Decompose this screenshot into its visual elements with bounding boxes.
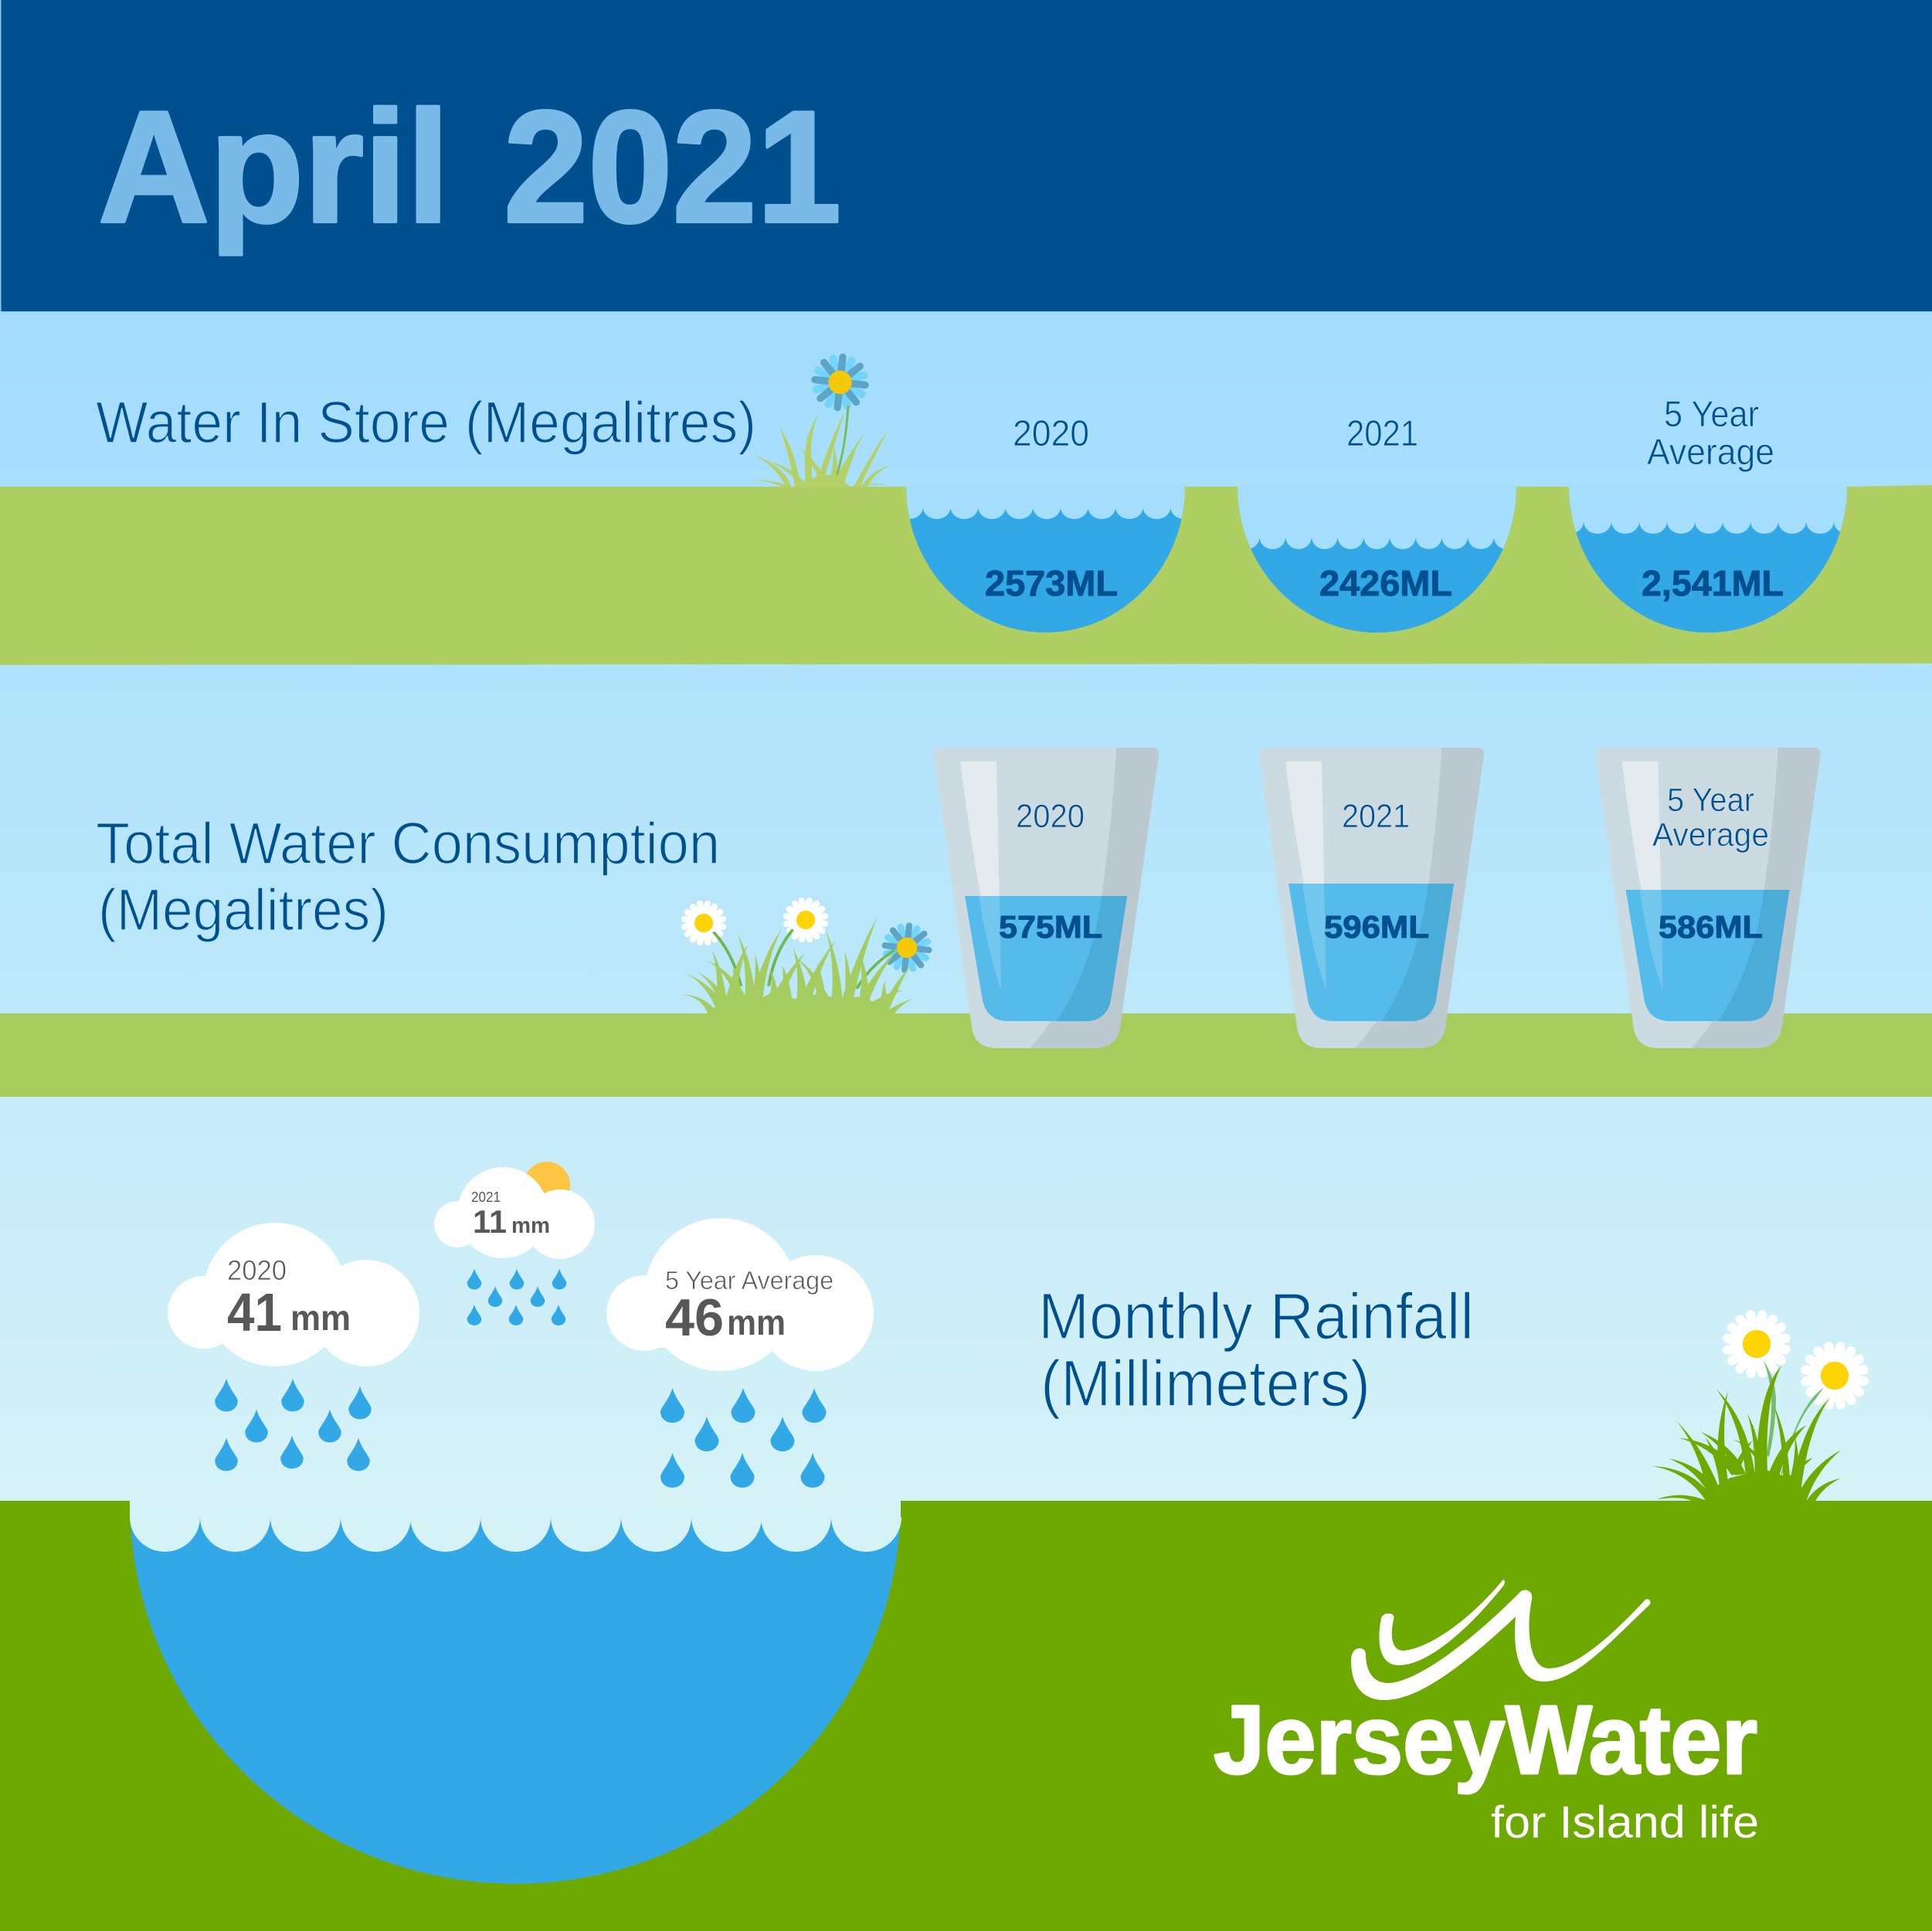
lake <box>130 1501 901 1884</box>
glass: 5 year average: Average <box>1652 816 1769 854</box>
reservoir: 2020 <box>906 420 1185 633</box>
glass: 5 year average: 586ML <box>1659 909 1763 945</box>
cloud: 2020 <box>168 1223 419 1366</box>
reservoir: 5 year average: 5 Year <box>1664 393 1759 434</box>
glass: 2021 <box>1259 748 1484 1048</box>
cloud: 2021 with sun <box>434 1162 595 1259</box>
glass: 2020: 2020 <box>1016 798 1085 835</box>
cloud: 2021 with sun: 11 <box>473 1203 507 1240</box>
sky band 2 <box>0 665 1932 1013</box>
cloud: 5 year average <box>606 1218 874 1371</box>
reservoir: 5 year average: Average <box>1647 431 1774 472</box>
rain drops: 2021 <box>467 1268 566 1325</box>
rain drops: 5 year average <box>660 1388 827 1488</box>
reservoir: 5 year average <box>1569 402 1847 633</box>
glass: 2021: 596ML <box>1324 909 1429 945</box>
sky band 1 <box>0 312 1932 487</box>
cloud: 2020: 41 <box>227 1282 282 1342</box>
cloud: 2020: mm <box>290 1298 351 1338</box>
title: 2021 <box>504 78 841 256</box>
heading: monthly rainfall: (Millimeters) <box>1041 1347 1370 1420</box>
reservoir: 5 year average: 2,541ML <box>1642 563 1784 603</box>
cloud: 5 year average: 5 Year Average <box>665 1266 834 1295</box>
logo: Jersey Water <box>1214 1580 1759 1848</box>
reservoir: 2021: 2426ML <box>1319 563 1452 603</box>
cloud: 5 year average: 46 <box>665 1288 724 1347</box>
heading: total water consumption: (Megalitres) <box>98 877 389 943</box>
reservoir: 2021: 2021 <box>1346 412 1418 453</box>
icon: blue flower and grass <box>751 355 892 487</box>
cloud: 2021 with sun: mm <box>511 1213 550 1238</box>
icon: flowers and grass <box>681 897 931 1013</box>
icon: daisies and grass <box>1652 1309 1869 1501</box>
cloud: 5 year average: mm <box>727 1302 786 1342</box>
panel: water in store <box>0 312 1932 665</box>
ground band 2 <box>0 1013 1932 1097</box>
panel: total water consumption <box>0 665 1932 1097</box>
logo wordmark: JerseyWater <box>1214 1685 1757 1794</box>
glass: 2020: 575ML <box>999 909 1102 945</box>
panel: monthly rainfall <box>0 1097 1932 1931</box>
ground band 3 <box>0 1501 1932 1931</box>
glass: 2021: 2021 <box>1342 798 1410 835</box>
title: April <box>98 78 450 256</box>
cloud: 2021 with sun: 2021 <box>471 1189 501 1205</box>
heading: total water consumption: Total Water Consumption <box>96 811 720 877</box>
heading: monthly rainfall: Monthly Rainfall <box>1038 1280 1474 1352</box>
sky band 3 <box>0 1097 1932 1501</box>
glass: 5 year average: 5 Year <box>1667 782 1754 819</box>
rain drops: 2020 <box>215 1379 372 1471</box>
logo tagline: for Island life <box>1491 1797 1759 1848</box>
reservoir: 2021 <box>1234 412 1522 637</box>
reservoir: 2020: 2573ML <box>985 563 1118 603</box>
header band <box>0 0 1932 312</box>
logo mark <box>1351 1580 1650 1700</box>
heading: water in store: Water In Store (Megalitres) <box>96 390 756 456</box>
reservoir: 2020: 2020 <box>1013 412 1089 453</box>
glass: 2020 <box>934 748 1159 1048</box>
glass: 5 year average <box>1595 748 1821 1048</box>
ground band 1 <box>0 485 1932 665</box>
cloud: 2020: 2020 <box>227 1254 287 1286</box>
